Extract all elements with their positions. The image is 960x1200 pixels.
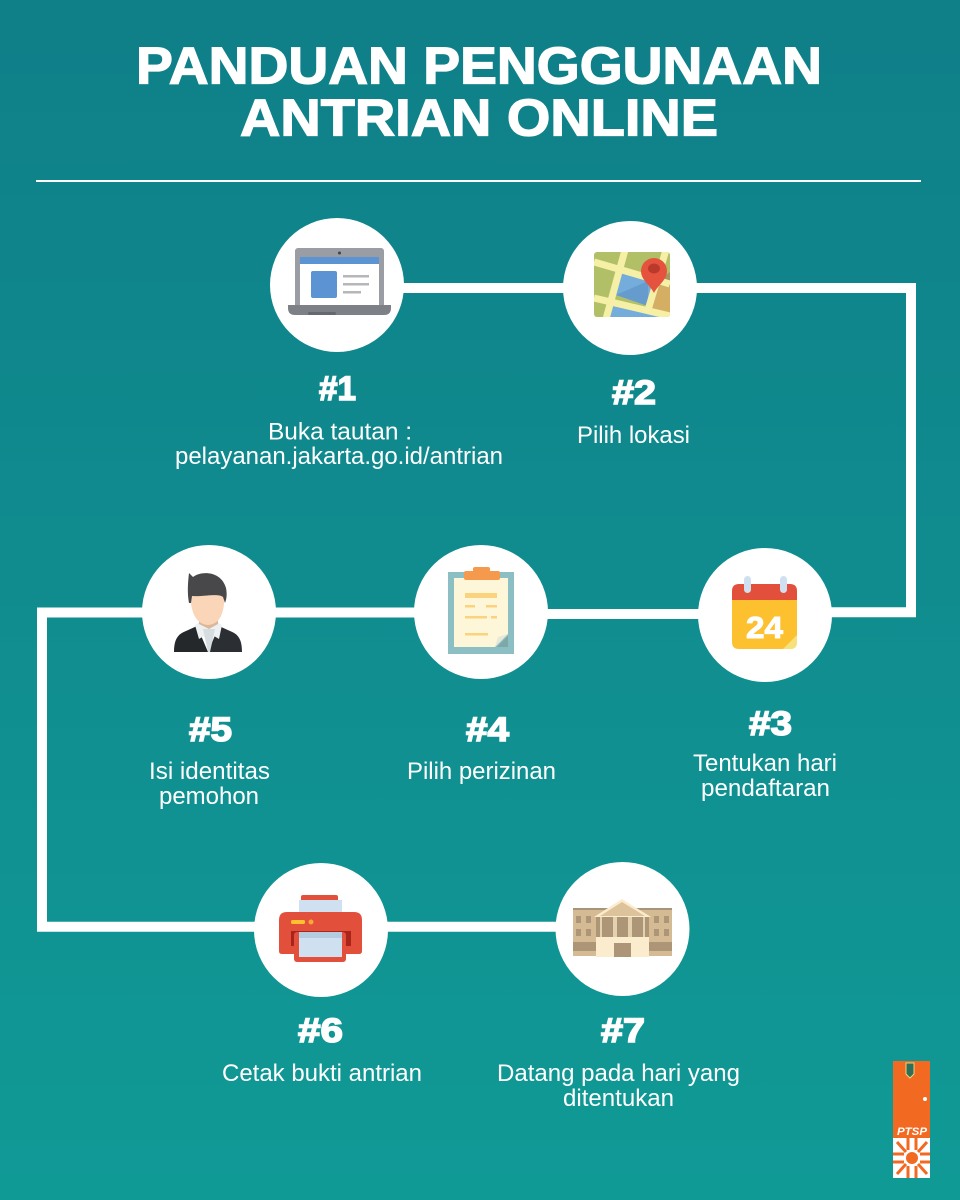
step 3: choose registration day <box>693 548 837 802</box>
icon: calendar: 24 <box>746 610 784 645</box>
step number 5: #5 <box>189 711 232 749</box>
logo: PTSP: PTSP <box>897 1126 928 1138</box>
step number 1: #1 <box>319 370 356 408</box>
step 3 text: Tentukan hari <box>693 750 837 777</box>
step 7 text <box>497 1060 740 1112</box>
connector path <box>42 288 911 927</box>
icon: printer <box>279 895 362 962</box>
title <box>136 38 822 148</box>
step 5 text: pemohon <box>159 783 259 810</box>
step 3 text: pendaftaran <box>701 775 830 802</box>
step 2 text: Pilih lokasi <box>577 422 690 449</box>
title: ANTRIAN ONLINE <box>240 90 718 148</box>
icon: government building <box>573 899 672 957</box>
step 5 text: Isi identitas <box>149 758 270 785</box>
icon: laptop <box>288 248 391 315</box>
step number 6: #6 <box>298 1012 343 1050</box>
step 2: choose location <box>563 221 697 449</box>
step 6 text: Cetak bukti antrian <box>222 1060 422 1087</box>
icon: clipboard <box>448 567 514 654</box>
step number 4: #4 <box>466 711 509 749</box>
step 5 text <box>149 758 270 810</box>
step number 7: #7 <box>601 1012 645 1050</box>
step 7: come on the chosen day <box>497 862 740 1112</box>
icon: calendar <box>732 576 797 649</box>
step 6: print queue receipt <box>222 863 422 1087</box>
step 4 text: Pilih perizinan <box>407 758 556 785</box>
logo: PTSP <box>893 1061 930 1178</box>
step 4: choose permit <box>407 545 556 785</box>
title: PANDUAN PENGGUNAAN <box>136 38 822 96</box>
icon: person <box>174 573 242 652</box>
step 1 text <box>175 418 503 470</box>
step number 2: #2 <box>612 374 656 412</box>
step 7 text: Datang pada hari yang <box>497 1060 740 1087</box>
icon: map pin <box>594 250 670 319</box>
step 5: fill applicant identity <box>142 545 276 810</box>
step number 3: #3 <box>749 705 792 743</box>
step 1: open link <box>175 218 503 470</box>
step 1 text: Buka tautan : <box>268 418 412 446</box>
step 3 text <box>693 750 837 802</box>
step 7 text: ditentukan <box>563 1085 674 1112</box>
step 1 text: pelayanan.jakarta.go.id/antrian <box>175 443 503 470</box>
